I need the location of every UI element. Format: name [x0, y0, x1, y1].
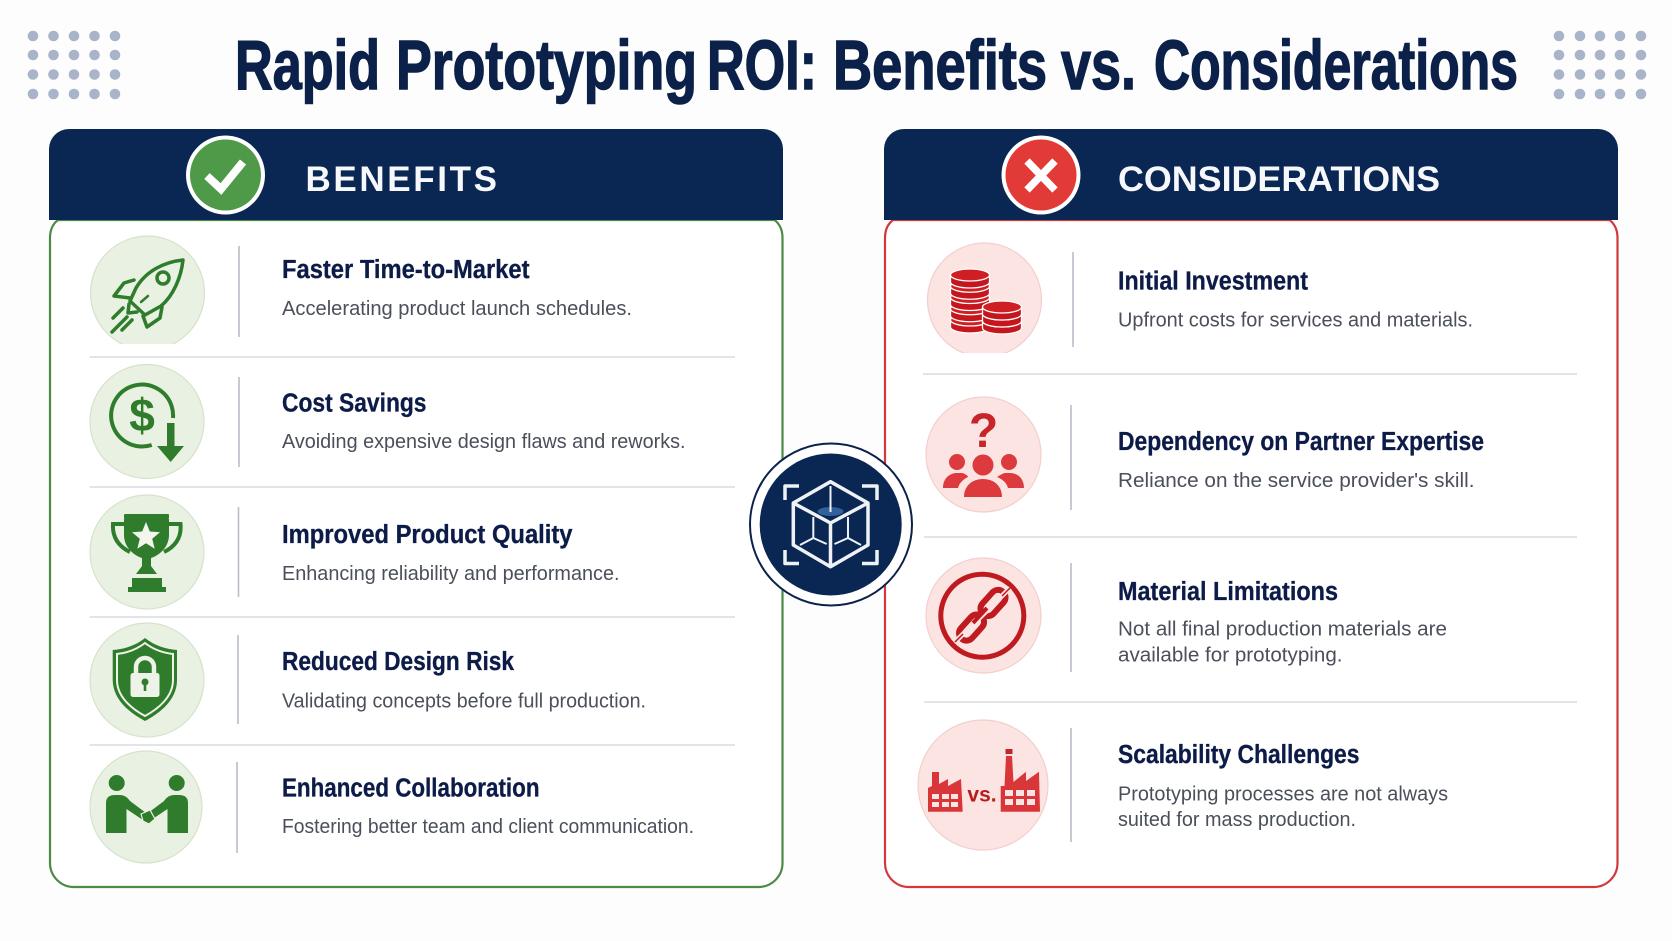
considerations panel frame	[885, 220, 1618, 887]
row: enhanced collaboration	[90, 751, 694, 863]
icon: people with question mark: ?	[969, 405, 998, 458]
divider	[237, 635, 239, 724]
considerations heading: CONSIDERATIONS	[1118, 160, 1440, 199]
divider	[238, 246, 240, 337]
item description: Prototyping processes are not always	[1118, 782, 1448, 806]
icon: handshake	[90, 751, 202, 863]
row: faster time-to-market	[90, 236, 632, 350]
item title: Material Limitations	[1118, 578, 1338, 606]
item description: Reliance on the service provider's skill.	[1118, 469, 1474, 492]
divider	[1070, 563, 1072, 672]
title: Considerations	[1154, 26, 1518, 104]
item description: available for prototyping.	[1118, 644, 1342, 666]
icon: coin stacks	[928, 243, 1042, 357]
icon: check badge	[186, 136, 265, 214]
icon: x badge	[1002, 136, 1080, 214]
row: improved product quality	[90, 495, 620, 609]
title: Prototyping	[396, 26, 697, 104]
considerations header bar	[884, 129, 1618, 220]
divider	[238, 507, 240, 597]
row: cost savings	[90, 364, 686, 478]
row: material limitations	[926, 558, 1447, 673]
icon: dollar with down arrow: $	[129, 389, 155, 441]
icon: central 3D cube badge	[750, 444, 912, 606]
item title: Scalability Challenges	[1118, 741, 1360, 769]
row: dependency on partner expertise	[926, 397, 1484, 512]
row: initial investment	[928, 243, 1473, 357]
benefits heading: BENEFITS	[306, 160, 497, 199]
benefits panel frame	[50, 220, 782, 887]
icon: broken chain	[926, 558, 1041, 673]
icon: small factory vs large factory: vs.	[967, 784, 997, 807]
item title: Reduced Design Risk	[282, 648, 515, 676]
title	[235, 26, 1518, 104]
icon: people with question mark	[926, 397, 1041, 512]
item description: Validating concepts before full production.	[282, 690, 646, 712]
title: vs.	[1061, 26, 1136, 104]
item title: Faster Time-to-Market	[282, 256, 530, 284]
icon: small factory vs large factory	[918, 720, 1048, 850]
item description: suited for mass production.	[1118, 808, 1356, 831]
title: Benefits	[833, 26, 1047, 104]
item description: Upfront costs for services and materials.	[1118, 308, 1473, 332]
item description	[1118, 618, 1447, 666]
panel: considerations	[884, 129, 1618, 887]
item title: Enhanced Collaboration	[282, 774, 540, 802]
title: Rapid	[235, 26, 380, 104]
item description: Enhancing reliability and performance.	[282, 562, 620, 585]
decorative dot grid: right	[1554, 31, 1646, 99]
item description	[1118, 782, 1448, 831]
icon: dollar with down arrow	[90, 364, 204, 478]
divider	[238, 377, 240, 467]
divider	[1072, 252, 1074, 347]
title: ROI:	[707, 26, 817, 104]
divider	[1070, 405, 1072, 510]
row: scalability challenges	[918, 720, 1448, 850]
icon: trophy	[90, 495, 204, 609]
item title: Cost Savings	[282, 390, 426, 418]
item description: Not all final production materials are	[1118, 618, 1447, 640]
item description: Accelerating product launch schedules.	[282, 297, 632, 320]
item title: Initial Investment	[1118, 268, 1308, 296]
divider	[1070, 728, 1072, 842]
row: reduced design risk	[90, 623, 646, 737]
decorative dot grid: left	[28, 31, 120, 99]
divider	[236, 762, 238, 853]
item title: Dependency on Partner Expertise	[1118, 428, 1484, 456]
item description: Avoiding expensive design flaws and reworks.	[282, 430, 686, 453]
panel: benefits	[49, 129, 783, 887]
item description: Fostering better team and client communication.	[282, 815, 694, 838]
item title: Improved Product Quality	[282, 521, 573, 549]
benefits header bar	[49, 129, 783, 220]
icon: rocket	[90, 236, 204, 350]
icon: shield with padlock	[90, 623, 204, 737]
